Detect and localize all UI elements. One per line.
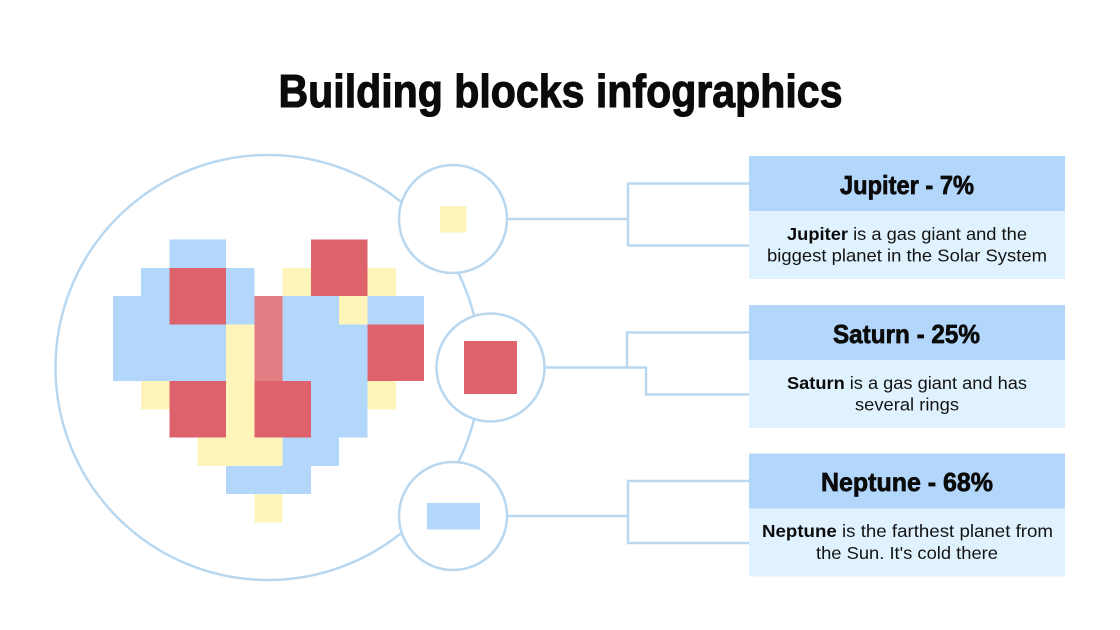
text: Jupiter description: Jupiter is a gas giant and the [787, 224, 1027, 244]
large outline circle [56, 155, 480, 580]
node: Neptune circle with blue block [399, 462, 507, 570]
connector: Neptune [507, 481, 749, 543]
node: Jupiter circle with yellow block [399, 165, 507, 273]
heading: Saturn: Saturn - 25% [833, 319, 980, 349]
heading: Neptune: Neptune - 68% [821, 467, 993, 497]
title: Building blocks infographics [278, 65, 842, 117]
pixel heart [113, 240, 424, 522]
heading: Jupiter: Jupiter - 7% [840, 170, 974, 200]
text: Jupiter description: biggest planet in the Solar System [767, 246, 1047, 266]
text: Jupiter description [767, 224, 1047, 266]
text: Saturn description: Saturn is a gas giant and has [787, 373, 1027, 393]
connector: Saturn [544, 332, 749, 394]
text: Neptune description: Neptune is the farthest planet from [762, 521, 1053, 541]
card: Saturn [749, 305, 1065, 428]
node: Saturn circle with red block [436, 314, 544, 422]
connector: Jupiter [507, 184, 749, 246]
card: Jupiter [749, 156, 1065, 279]
text: Neptune description: the Sun. It's cold there [816, 543, 998, 563]
text: Saturn description [787, 373, 1027, 414]
text: Neptune description [762, 521, 1053, 563]
text: Saturn description: several rings [855, 394, 959, 414]
card: Neptune [749, 454, 1065, 576]
